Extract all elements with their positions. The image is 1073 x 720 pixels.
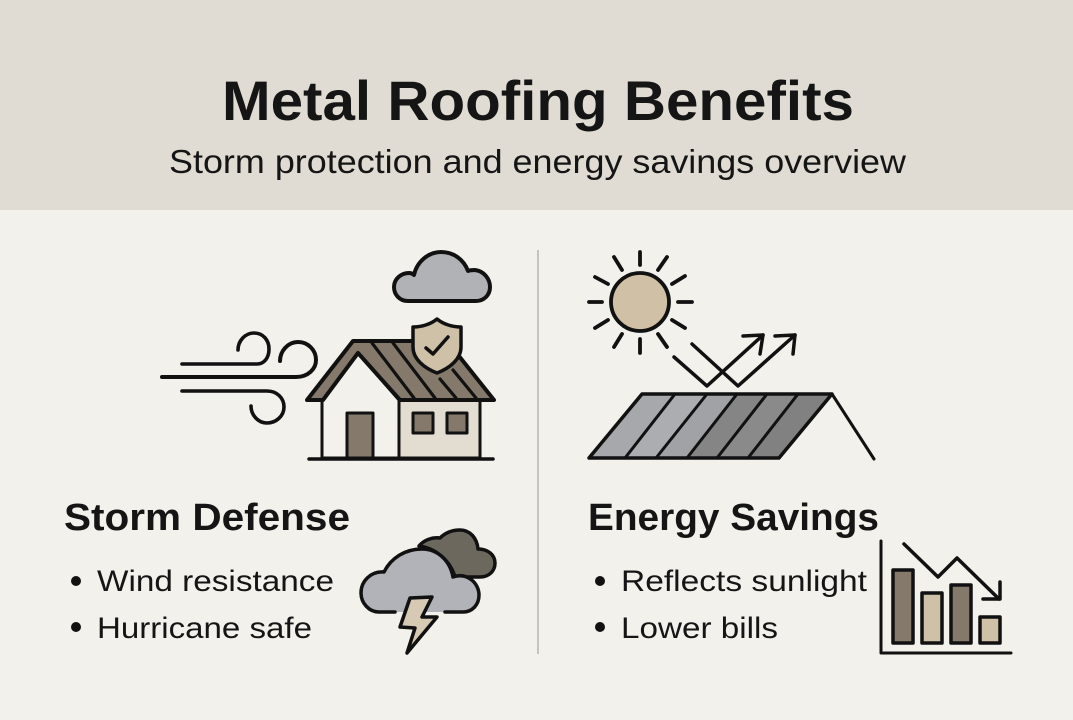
house side wall [399,400,480,458]
icon: cloud [394,252,490,301]
lightning bolt [400,597,437,653]
roof [307,341,494,400]
panel: energy savings [588,252,1011,653]
list: storm benefits: Hurricane safe [97,612,312,645]
door [347,413,373,458]
icon: metal roof [589,394,874,459]
check mark [426,337,448,354]
house front [322,353,399,458]
icon: wind [162,333,316,423]
title: Metal Roofing Benefits [222,69,854,132]
heading: energy savings: Energy Savings [588,497,879,539]
list: energy benefits: Reflects sunlight [621,565,868,598]
list: energy benefits [595,565,868,645]
list: storm benefits: Wind resistance [97,565,334,598]
heading: storm defense: Storm Defense [64,497,350,539]
header band [0,0,1073,210]
subtitle: Storm protection and energy savings overview [169,143,906,180]
shield [413,319,461,373]
windows [413,413,467,433]
ground line [309,457,493,461]
roof seams [372,343,476,398]
icon: house with shield [307,319,494,459]
chart: falling energy bills [881,541,1011,653]
list: energy benefits: Lower bills [621,612,778,645]
icon: sun [589,252,692,353]
icon: storm clouds with lightning [361,530,495,653]
list: storm benefits [71,565,334,645]
panel divider [537,250,539,654]
icon: reflected sunlight arrows [674,335,795,386]
panel: storm defense [64,252,495,653]
